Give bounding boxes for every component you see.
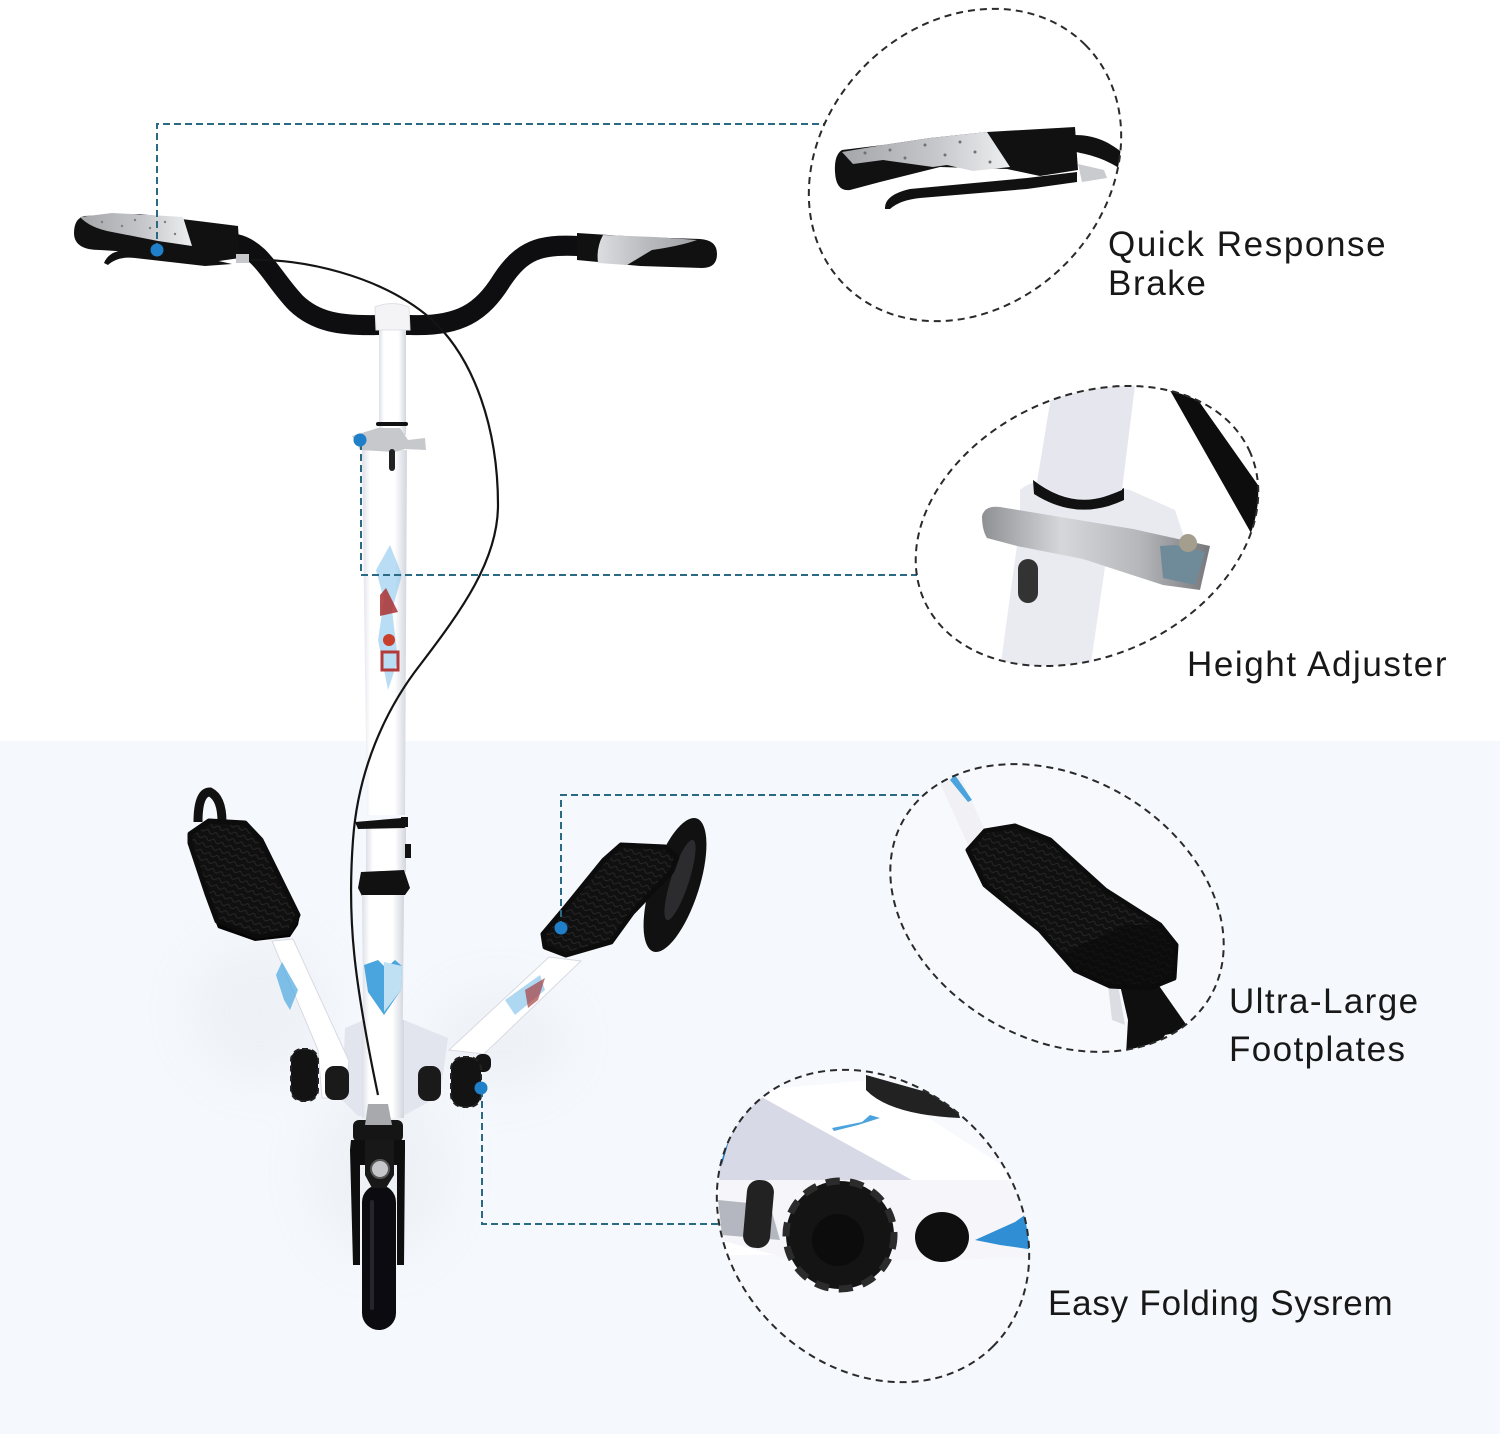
left foot pedal and arm bbox=[190, 792, 349, 1101]
brake cable bbox=[250, 260, 498, 1095]
detail circle: height adjuster bbox=[914, 385, 1260, 667]
detail circle: brake grip bbox=[808, 8, 1122, 322]
background: lower tinted band bbox=[0, 741, 1500, 1434]
base plate bbox=[342, 1020, 448, 1116]
right grip bbox=[577, 233, 717, 268]
stem stickers bbox=[364, 545, 402, 1015]
connector: brake bbox=[150, 124, 830, 256]
label: ultra-large footplates: Ultra-Large bbox=[1229, 982, 1419, 1021]
handlebar clamp bbox=[375, 304, 410, 330]
label: ultra-large footplates: Footplates bbox=[1229, 1030, 1406, 1069]
stem bbox=[352, 325, 426, 1110]
label: quick response brake: Brake bbox=[1108, 264, 1207, 303]
connector: footplates bbox=[554, 795, 930, 934]
front wheel and fork bbox=[350, 1104, 405, 1330]
connector: folding system bbox=[474, 1082, 720, 1224]
connector: height adjuster bbox=[354, 434, 918, 575]
label: quick response brake: Quick Response bbox=[1108, 225, 1387, 264]
label: easy folding system: Easy Folding Sysrem bbox=[1048, 1284, 1394, 1323]
label: height adjuster: Height Adjuster bbox=[1187, 645, 1448, 684]
detail circle: folding knob bbox=[716, 1068, 1030, 1384]
detail circle: footplate bbox=[889, 763, 1225, 1053]
scooter illustration bbox=[74, 213, 719, 1330]
handlebar bar bbox=[236, 244, 578, 325]
right foot pedal, wheel and arm bbox=[418, 811, 719, 1107]
left brake grip bbox=[74, 213, 249, 266]
